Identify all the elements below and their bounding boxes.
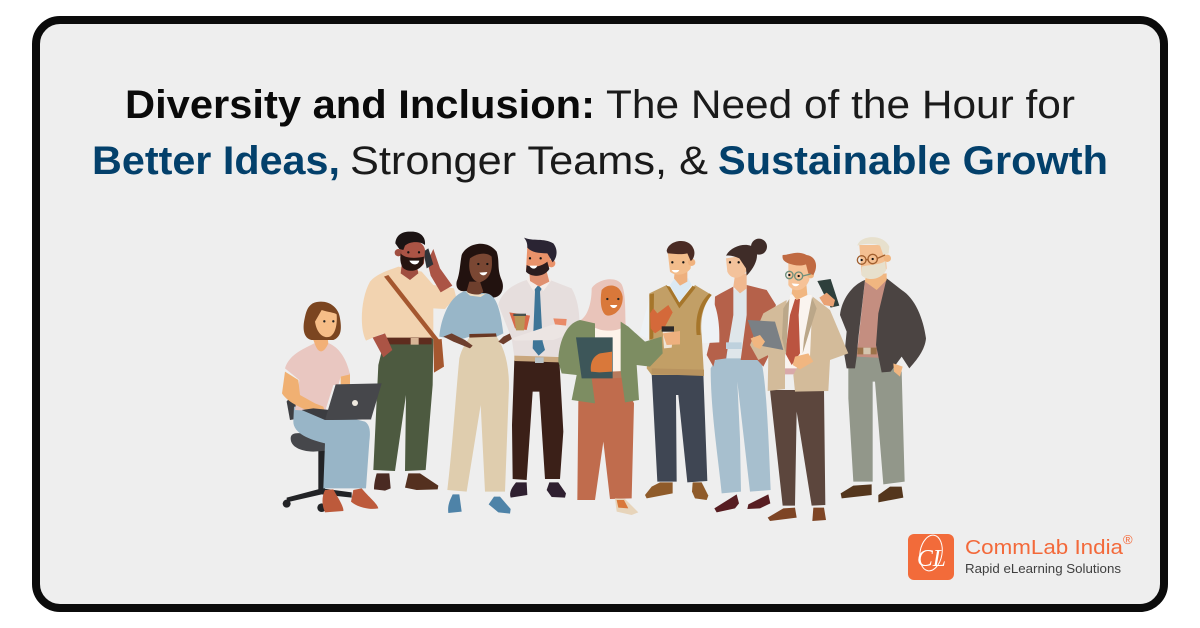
logo tagline: Rapid eLearning Solutions bbox=[965, 561, 1122, 576]
title line 1: Diversity and Inclusion: bbox=[125, 83, 595, 127]
person: red-haired man with glasses, tablet and phone bbox=[748, 253, 848, 521]
title line 2: Sustainable Growth bbox=[718, 139, 1108, 183]
title line 2: Better Ideas, bbox=[92, 139, 340, 183]
title line 1 bbox=[125, 83, 1075, 127]
registered mark: ® bbox=[1123, 532, 1133, 547]
person: man on phone with shoulder bag bbox=[362, 232, 456, 491]
logo name: CommLab India bbox=[965, 537, 1124, 559]
illustration: group of diverse colleagues bbox=[282, 232, 926, 521]
person: seated woman with laptop bbox=[282, 302, 382, 512]
person: man with blue tie and coffee cup bbox=[498, 238, 579, 498]
title line 2 bbox=[92, 139, 1108, 183]
person: older man with glasses and grey cardigan bbox=[840, 237, 926, 502]
logo mark: CL bbox=[917, 546, 946, 572]
logo: CommLab India bbox=[908, 532, 1133, 580]
title line 2: Stronger Teams, & bbox=[350, 139, 708, 183]
coffee cup held by man in vest bbox=[662, 326, 680, 348]
title bbox=[92, 83, 1108, 183]
title line 1: The Need of the Hour for bbox=[606, 83, 1075, 127]
logo mark bbox=[908, 533, 954, 580]
person: woman with hair bun in blue trousers bbox=[707, 239, 776, 512]
person: man in tan vest bbox=[639, 241, 719, 500]
person: woman in hijab with green jacket bbox=[558, 279, 673, 515]
person: woman with long curly hair in cream trousers bbox=[439, 244, 518, 514]
